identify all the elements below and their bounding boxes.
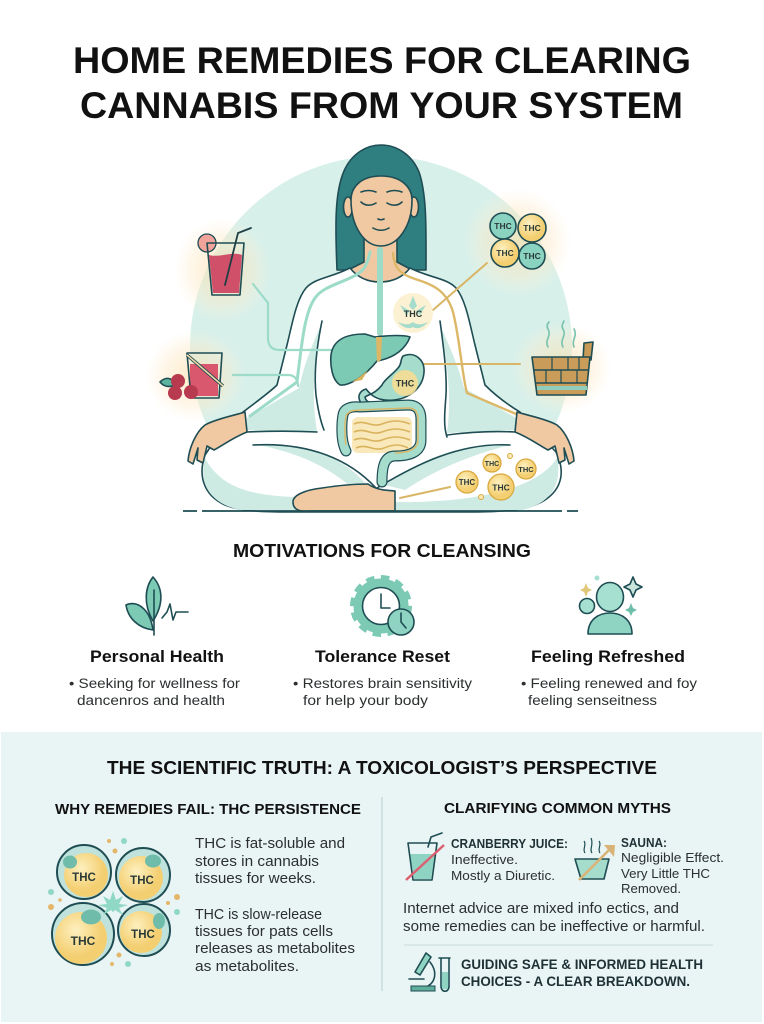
arm and leg shading	[203, 325, 558, 510]
icon: microscope and test tube	[409, 953, 450, 991]
cells illustration: THC	[130, 875, 154, 887]
background circle	[190, 158, 572, 424]
motivation: feeling refreshed: feeling senseitness	[528, 693, 657, 708]
icon: leaf with pulse	[126, 577, 188, 635]
motivation: tolerance reset: Tolerance Reset	[315, 648, 451, 666]
motivation: feeling refreshed	[521, 576, 697, 708]
cells illustration: THC	[72, 872, 96, 884]
liver	[331, 334, 410, 385]
THC leaf	[393, 293, 433, 333]
text: internet advice: Internet advice are mixed info ectics, and	[403, 901, 679, 917]
myth: cranberry juice: CRANBERRY JUICE:	[451, 837, 568, 851]
motivation: feeling refreshed: • Feeling renewed and foy	[521, 676, 697, 691]
section: motivations heading: MOTIVATIONS FOR CLEANSING	[233, 541, 531, 561]
text: THC is slow-release: releases as metabolites	[195, 941, 355, 957]
panel heading: THE SCIENTIFIC TRUTH: A TOXICOLOGIST’S PERSPECTIVE	[107, 758, 657, 778]
motivation: tolerance reset: for help your body	[303, 693, 428, 708]
THC molecules cluster	[490, 213, 546, 269]
stomach: THC	[396, 378, 415, 388]
subheading: why remedies fail: WHY REMEDIES FAIL: THC PERSISTENCE	[55, 802, 361, 818]
fat cell THC bubbles: THC	[492, 482, 510, 492]
icon: sauna bucket	[532, 321, 593, 395]
title: CANNABIS FROM YOUR SYSTEM	[80, 85, 683, 126]
neck	[348, 236, 412, 282]
icon: gear with clock	[354, 579, 414, 635]
hair	[336, 145, 426, 270]
THC molecules cluster: THC	[523, 223, 541, 233]
cells illustration: THC	[131, 929, 155, 941]
myth: sauna: Negligible Effect.	[621, 850, 724, 865]
myth: cranberry juice: Mostly a Diuretic.	[451, 868, 555, 883]
glows behind icons	[145, 188, 612, 422]
icon: person with sparkles	[580, 576, 642, 634]
myth: cranberry juice: Ineffective.	[451, 852, 518, 867]
ground line	[183, 510, 578, 512]
myth: sauna: Very Little THC	[621, 866, 710, 881]
fat cell THC bubbles: THC	[459, 478, 475, 487]
motivation: personal health: • Seeking for wellness for	[69, 676, 241, 691]
stomach	[359, 355, 424, 408]
motivation: tolerance reset: • Restores brain sensitivity	[293, 676, 472, 691]
fat cell THC bubbles	[456, 454, 536, 500]
myth: cranberry juice	[406, 833, 568, 883]
THC molecules cluster: THC	[496, 248, 514, 258]
motivation: feeling refreshed: Feeling Refreshed	[531, 648, 685, 666]
body lines	[247, 321, 515, 488]
intestines	[342, 405, 421, 482]
text: THC is slow-release	[195, 907, 355, 975]
panel: scientific truth	[1, 732, 762, 1022]
text: THC is fat-soluble: stores in cannabis	[195, 854, 319, 870]
icon: crossed cup	[406, 833, 444, 880]
closing message: GUIDING SAFE & INFORMED HEALTH	[461, 957, 703, 972]
THC leaf: THC	[404, 309, 423, 319]
title: HOME REMEDIES FOR CLEARING	[73, 40, 691, 81]
motivation: personal health	[69, 577, 241, 708]
text: internet advice	[403, 901, 705, 935]
THC molecules cluster: THC	[523, 251, 541, 261]
text: THC is fat-soluble	[195, 836, 345, 887]
myth: sauna	[575, 836, 724, 896]
text: THC is fat-soluble: tissues for weeks.	[195, 871, 316, 887]
illustration: meditating figure with remedies	[145, 145, 612, 538]
text: internet advice: some remedies can be ineffective or harmful.	[403, 919, 705, 935]
text: THC is slow-release: tissues for pats cells	[195, 924, 333, 940]
fat cell THC bubbles: THC	[485, 461, 499, 468]
cells illustration: THC	[71, 934, 96, 948]
fat cell THC bubbles: THC	[518, 465, 534, 474]
text: THC is slow-release: THC is slow-release	[195, 907, 322, 923]
text: THC is fat-soluble: THC is fat-soluble and	[195, 836, 345, 852]
myth: sauna: SAUNA:	[621, 836, 667, 850]
motivation: personal health: Personal Health	[90, 648, 224, 666]
cells illustration	[48, 838, 180, 967]
closing message	[461, 957, 703, 989]
text: THC is slow-release: as metabolites.	[195, 959, 299, 975]
motivation: tolerance reset	[293, 579, 472, 708]
title	[73, 40, 691, 126]
closing message: CHOICES - A CLEAR BREAKDOWN.	[461, 974, 690, 989]
icon: cranberry glass crossed	[160, 353, 223, 400]
foot	[293, 484, 395, 511]
THC molecules cluster: THC	[494, 221, 512, 231]
subheading: clarifying myths: CLARIFYING COMMON MYTHS	[444, 801, 671, 817]
motivation: personal health: dancenros and health	[77, 693, 225, 708]
central teal and gold channels	[233, 250, 523, 498]
hands	[188, 412, 574, 464]
face	[344, 176, 418, 246]
body suit	[202, 268, 561, 512]
icon: steam bowl with arrow	[575, 838, 615, 880]
icon: juice glass	[198, 228, 251, 295]
myth: sauna: Removed.	[621, 881, 681, 896]
